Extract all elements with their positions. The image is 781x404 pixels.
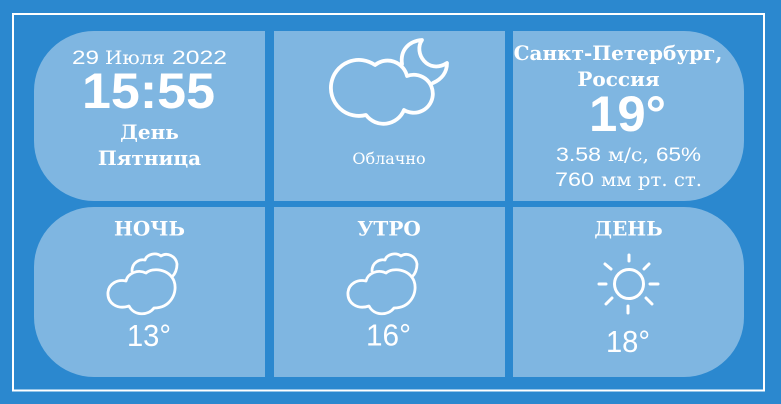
date: Июля (105, 47, 165, 69)
location: Россия (577, 67, 660, 91)
heading: НОЧЬ (114, 216, 185, 240)
date: 29 (72, 48, 99, 69)
day part: День (120, 120, 179, 144)
current temperature: 19° (589, 86, 666, 142)
heading: УТРО (357, 216, 421, 240)
temperature: 16° (366, 318, 411, 352)
icon: clouds (348, 254, 417, 314)
pressure: мм рт. ст. (601, 169, 702, 191)
condition label: Облачно (352, 149, 426, 168)
wind and humidity: 65% (656, 145, 701, 166)
wind and humidity (556, 144, 701, 166)
temperature: 18° (606, 324, 650, 359)
panel: date and time (34, 31, 265, 201)
panel: location and current weather (513, 31, 744, 201)
panel: day forecast (513, 207, 744, 377)
date: 2022 (172, 48, 227, 69)
date (72, 47, 227, 69)
location (514, 41, 722, 91)
icon: cloud with moon (331, 40, 447, 124)
location: Санкт-Петербург, (514, 41, 722, 65)
panel: morning forecast (274, 207, 505, 377)
pressure: 760 (555, 170, 594, 191)
panel: current condition (274, 31, 505, 201)
panel: night forecast (34, 207, 265, 377)
temperature: 13° (127, 318, 171, 353)
heading: ДЕНЬ (594, 216, 663, 240)
pressure (555, 169, 702, 191)
wind and humidity: м/с, (608, 144, 649, 166)
icon: clouds (108, 254, 177, 314)
icon: sun (599, 255, 658, 313)
weekday: Пятница (98, 146, 201, 170)
time: 15:55 (82, 63, 215, 119)
wind and humidity: 3.58 (556, 145, 601, 166)
